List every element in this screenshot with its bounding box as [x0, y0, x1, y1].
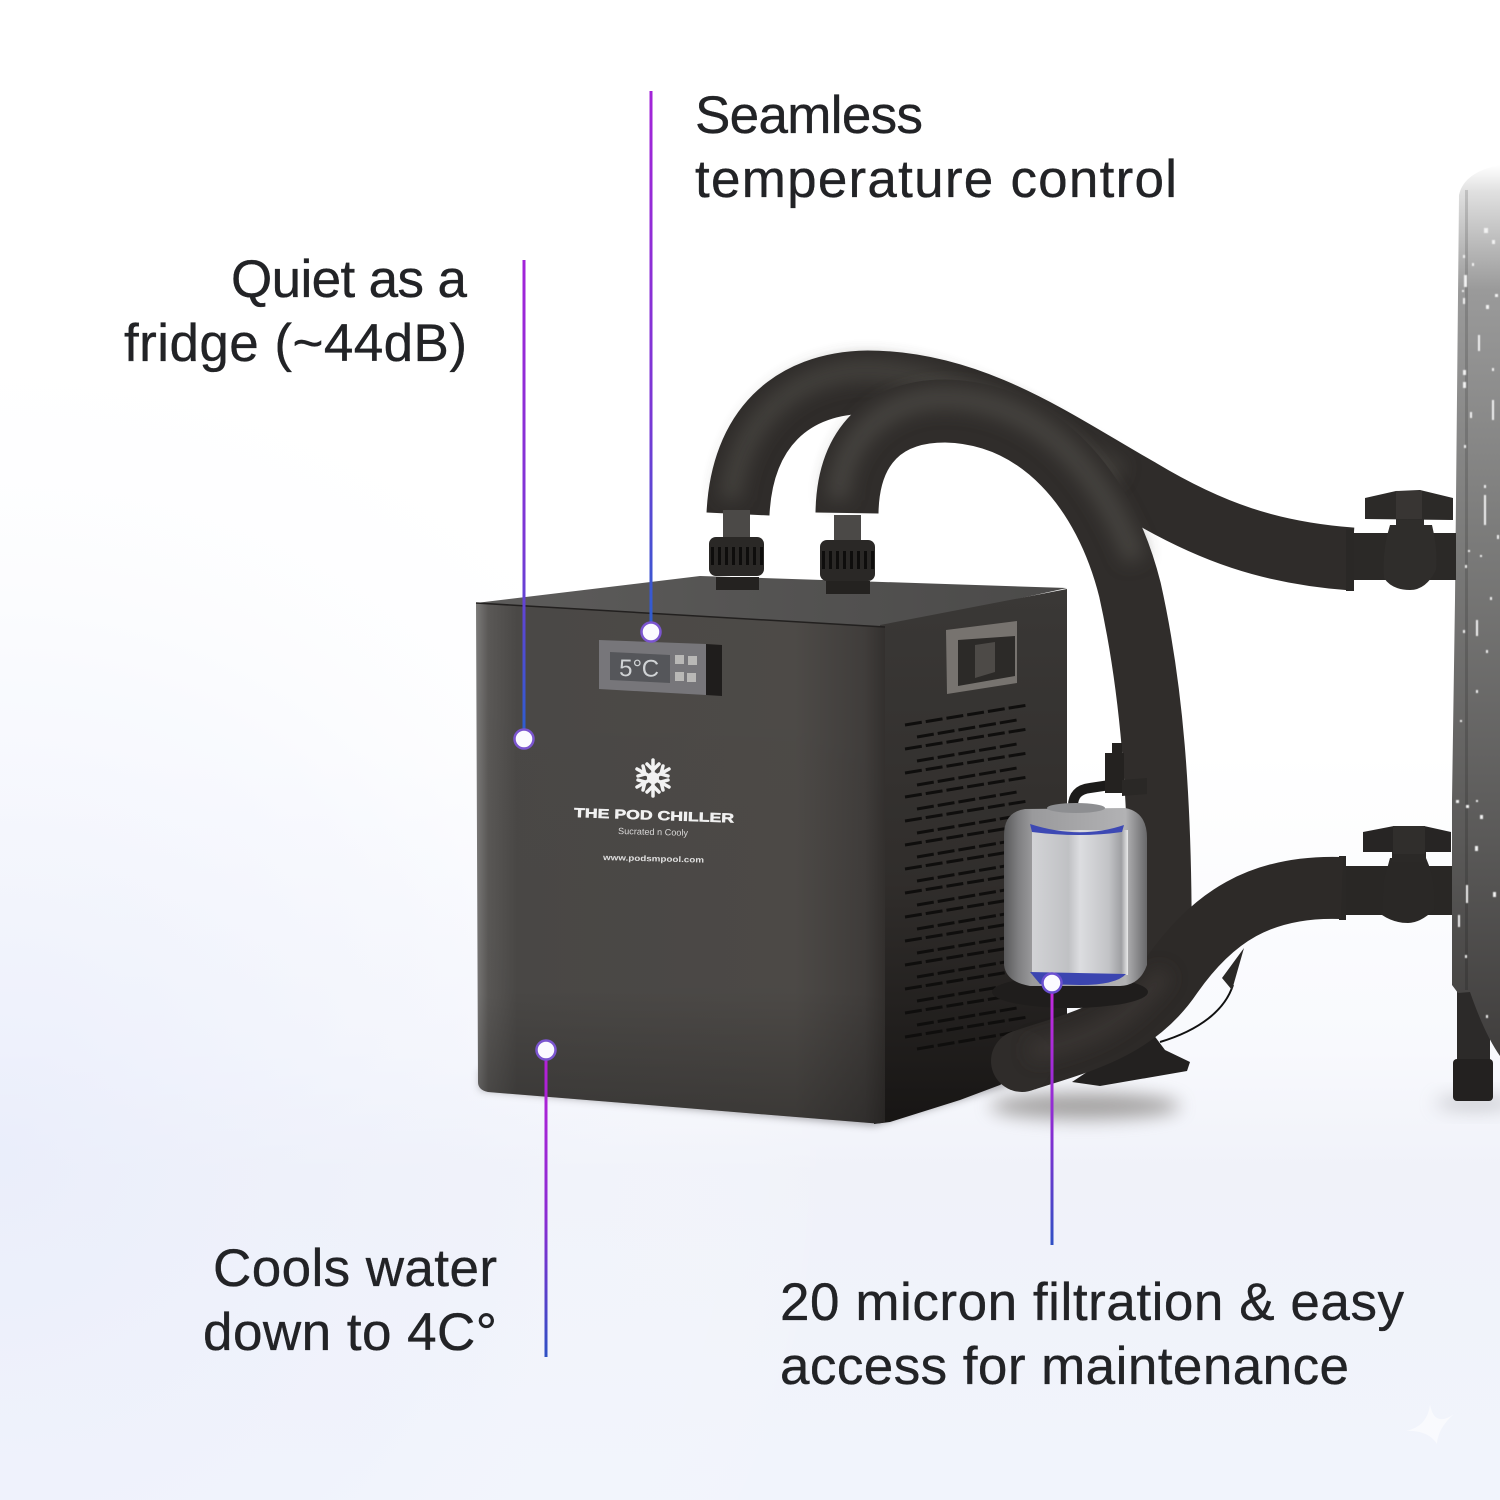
carry handle — [946, 621, 1017, 694]
chiller unit — [476, 576, 1067, 1124]
vent slots — [905, 705, 1028, 1049]
pipe stubs and gland nuts — [709, 510, 875, 594]
filter T-fitting — [1073, 743, 1147, 806]
callout: quiet as a fridge — [124, 250, 534, 748]
filter cartridge — [1032, 830, 1128, 975]
lower insulated hose — [991, 888, 1342, 1092]
callout: filtration — [780, 974, 1404, 1396]
floor shadows — [480, 1060, 1500, 1126]
back insulated hose — [730, 370, 1352, 559]
callout: cools water: Cools water — [213, 1239, 497, 1298]
callout: filtration: 20 micron filtration & easy — [780, 1273, 1404, 1332]
tank foot — [1453, 985, 1493, 1101]
callout: seamless temperature control — [642, 86, 1177, 642]
callout: seamless temperature control: Seamless — [695, 86, 923, 145]
callout: quiet as a fridge: fridge (~44dB) — [124, 314, 467, 373]
brand text — [574, 805, 735, 865]
brand text: www.podsmpool.com — [602, 853, 704, 865]
callout: cools water — [203, 1040, 556, 1362]
chiller top — [476, 576, 1067, 628]
sparkle watermark — [1406, 1404, 1454, 1444]
callout: quiet as a fridge: Quiet as a — [231, 250, 468, 309]
snowflake logo — [637, 760, 669, 796]
temperature display — [599, 640, 722, 696]
brand text: Sucrated n Cooly — [618, 826, 689, 838]
hose connectors right — [1339, 529, 1354, 920]
front insulated hose — [838, 398, 1160, 975]
mounting bracket and cable — [1072, 948, 1244, 1086]
water filter canister — [992, 803, 1148, 1008]
filter blue bands — [1030, 824, 1124, 835]
lower valve — [1346, 826, 1452, 923]
callout: cools water: down to 4C° — [203, 1303, 497, 1362]
upper valve — [1350, 490, 1456, 590]
brand text: THE POD CHILLER — [574, 805, 735, 826]
temperature display: 5°C — [619, 655, 659, 683]
chiller side panel — [874, 589, 1067, 1124]
callout: seamless temperature control: temperature control — [695, 150, 1177, 209]
tank water droplets — [1456, 228, 1499, 1018]
callout: filtration: access for maintenance — [780, 1337, 1349, 1396]
tank — [1452, 165, 1500, 1056]
chiller front panel — [476, 603, 885, 1123]
